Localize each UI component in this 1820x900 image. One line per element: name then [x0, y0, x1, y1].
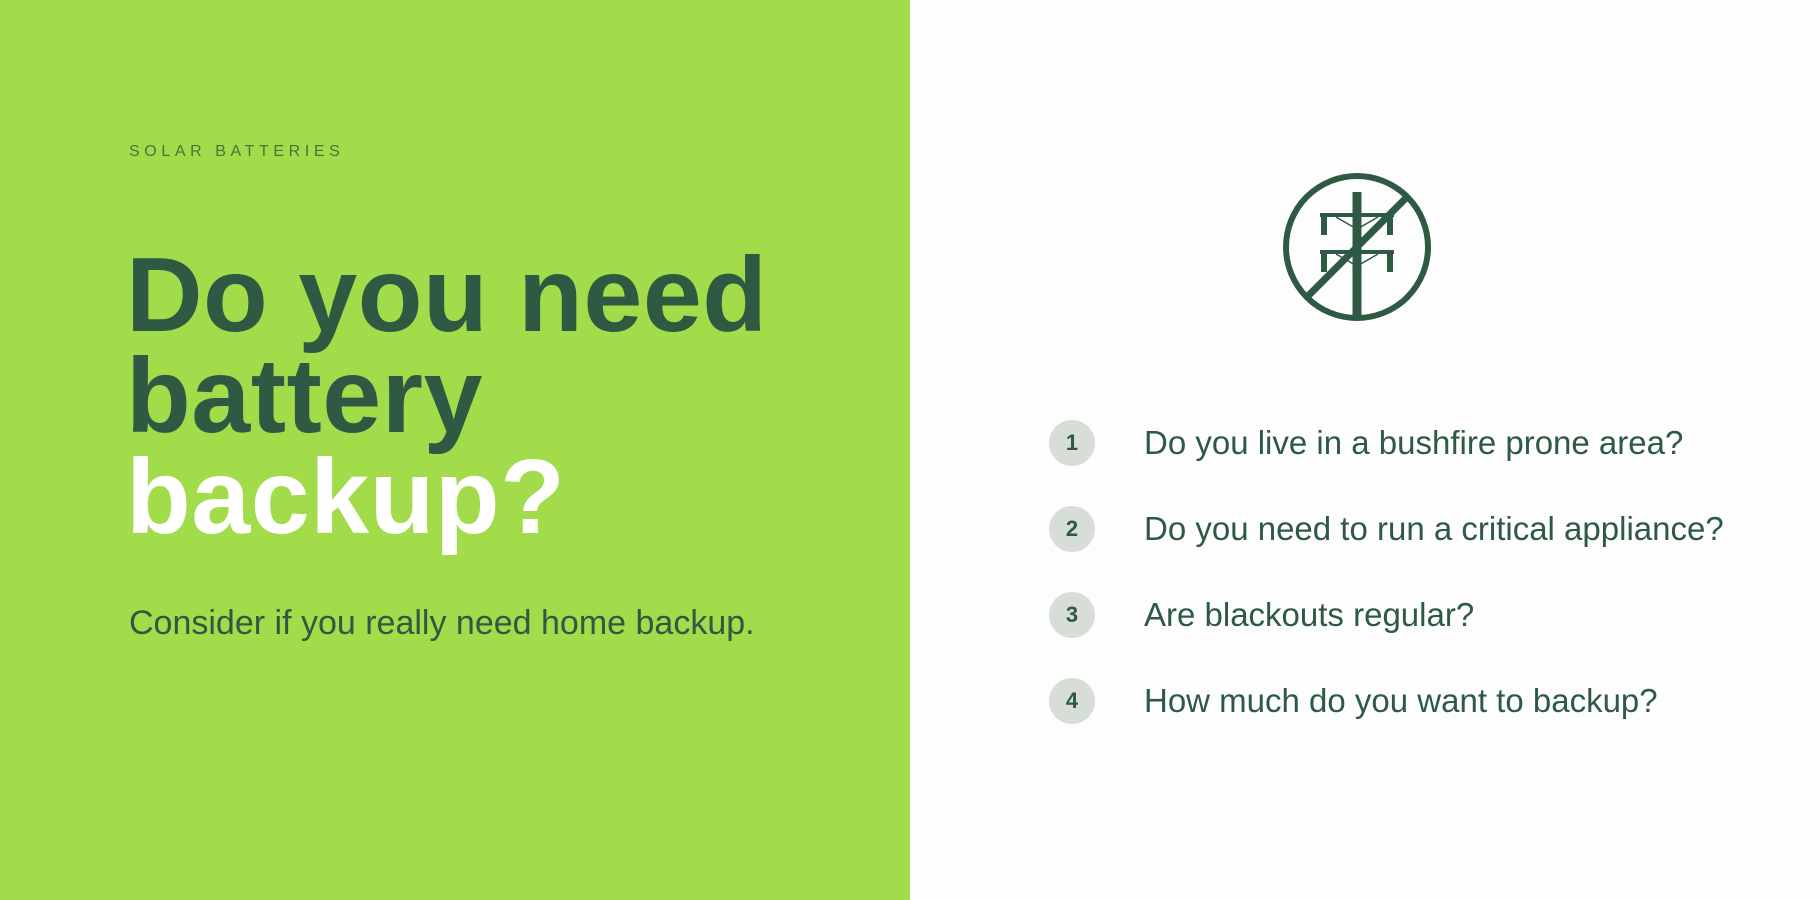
list item 2: 2	[1066, 516, 1078, 541]
list item 1: Do you live in a bushfire prone area?	[1144, 424, 1683, 461]
list item 3	[1049, 592, 1474, 638]
list item 3: 3	[1066, 602, 1078, 627]
list item 1	[1049, 420, 1683, 466]
title: backup?	[126, 438, 565, 556]
list item 4: How much do you want to backup?	[1144, 682, 1658, 719]
list item 2: Do you need to run a critical appliance?	[1144, 510, 1724, 547]
subtitle: Consider if you really need home backup.	[129, 604, 755, 642]
icon: no power pole	[1283, 173, 1431, 321]
list item 2	[1049, 506, 1724, 552]
list item 1: 1	[1066, 430, 1078, 455]
title: battery	[126, 337, 483, 455]
list item 4: 4	[1066, 688, 1078, 713]
title	[126, 236, 768, 556]
panel: left green	[0, 0, 910, 900]
list item 3: Are blackouts regular?	[1144, 596, 1474, 633]
title: Do you need	[126, 236, 768, 354]
kicker: SOLAR BATTERIES	[129, 143, 344, 160]
list item 4	[1049, 678, 1658, 724]
